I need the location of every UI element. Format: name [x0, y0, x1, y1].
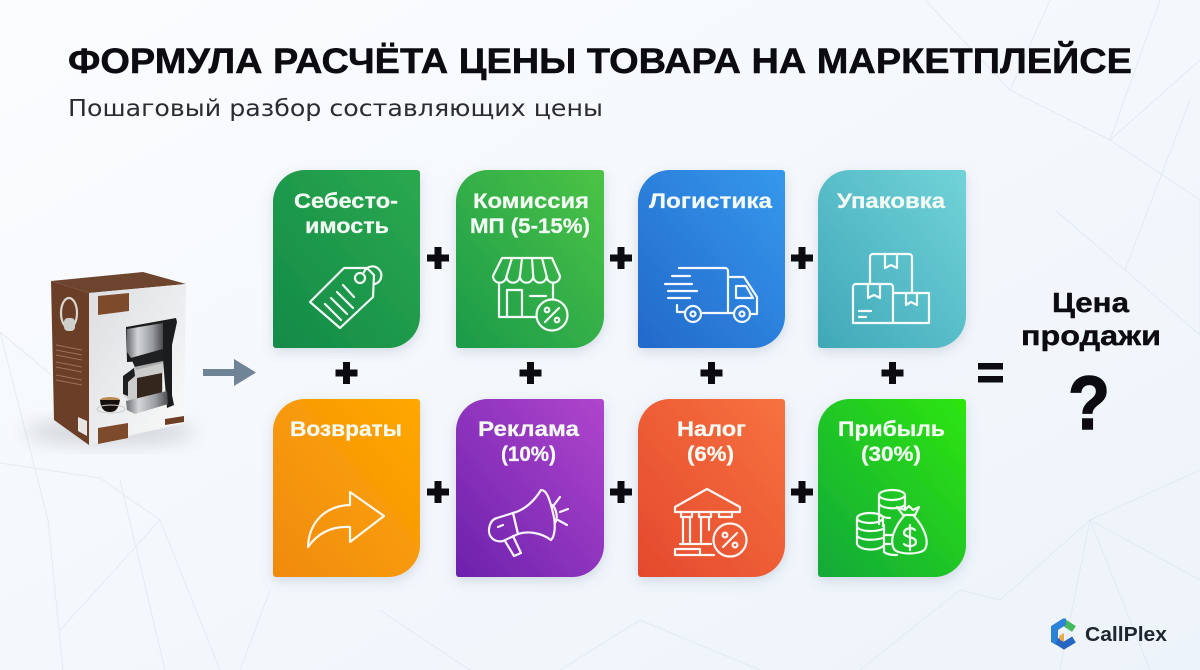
card: Прибыль — [818, 399, 966, 577]
card: Реклама: (10%) — [501, 442, 556, 466]
coffee maker body — [126, 318, 177, 408]
card: Комиссия МП: Комиссия — [473, 189, 589, 213]
icon: megaphone — [489, 490, 568, 556]
card: Прибыль: Прибыль — [838, 417, 945, 441]
card: Возвраты: Возвраты — [290, 417, 402, 441]
icon: bank with percent — [675, 489, 746, 556]
card: Реклама: Реклама — [478, 417, 580, 441]
card: Себестоимость: Себесто- — [294, 189, 398, 213]
result label: продажи — [1021, 320, 1161, 351]
result label — [1021, 287, 1161, 351]
card: Себестоимость — [273, 170, 420, 348]
card: Налог: Налог — [677, 417, 746, 441]
card: Возвраты — [273, 399, 420, 577]
card: Налог — [638, 399, 785, 577]
icon: shop with percent — [493, 258, 568, 330]
card: Логистика: Логистика — [649, 189, 773, 213]
icon: coins and money bag — [857, 490, 927, 555]
card: Себестоимость: имость — [305, 214, 389, 238]
product box with coffee maker — [25, 272, 195, 446]
equals sign — [978, 363, 1003, 382]
result label: Цена — [1052, 287, 1129, 318]
logo: CallPlex — [1054, 622, 1167, 646]
card: Прибыль: (30%) — [861, 442, 921, 466]
card: Упаковка — [818, 170, 966, 348]
icon: price tag — [310, 266, 381, 328]
card: Комиссия МП — [456, 170, 604, 348]
icon: stacked boxes — [853, 254, 929, 323]
icon: logo mark — [1054, 622, 1074, 646]
plus signs between cards — [336, 247, 904, 503]
card: Комиссия МП: МП (5-15%) — [470, 214, 590, 238]
icon: share arrow — [308, 492, 384, 547]
arrow: product to formula — [203, 359, 256, 386]
icon: delivery truck — [665, 268, 757, 322]
logo: CallPlex: CallPlex — [1085, 624, 1167, 646]
title: ФОРМУЛА РАСЧЁТА ЦЕНЫ ТОВАРА НА МАРКЕТПЛЕЙСЕ — [68, 41, 1132, 81]
card: Логистика — [638, 170, 785, 348]
question mark: ? — [1068, 361, 1110, 446]
card: Реклама — [456, 399, 604, 577]
card: Упаковка: Упаковка — [837, 189, 946, 213]
subtitle: Пошаговый разбор составляющих цены — [68, 96, 603, 122]
card: Налог: (6%) — [687, 442, 734, 466]
